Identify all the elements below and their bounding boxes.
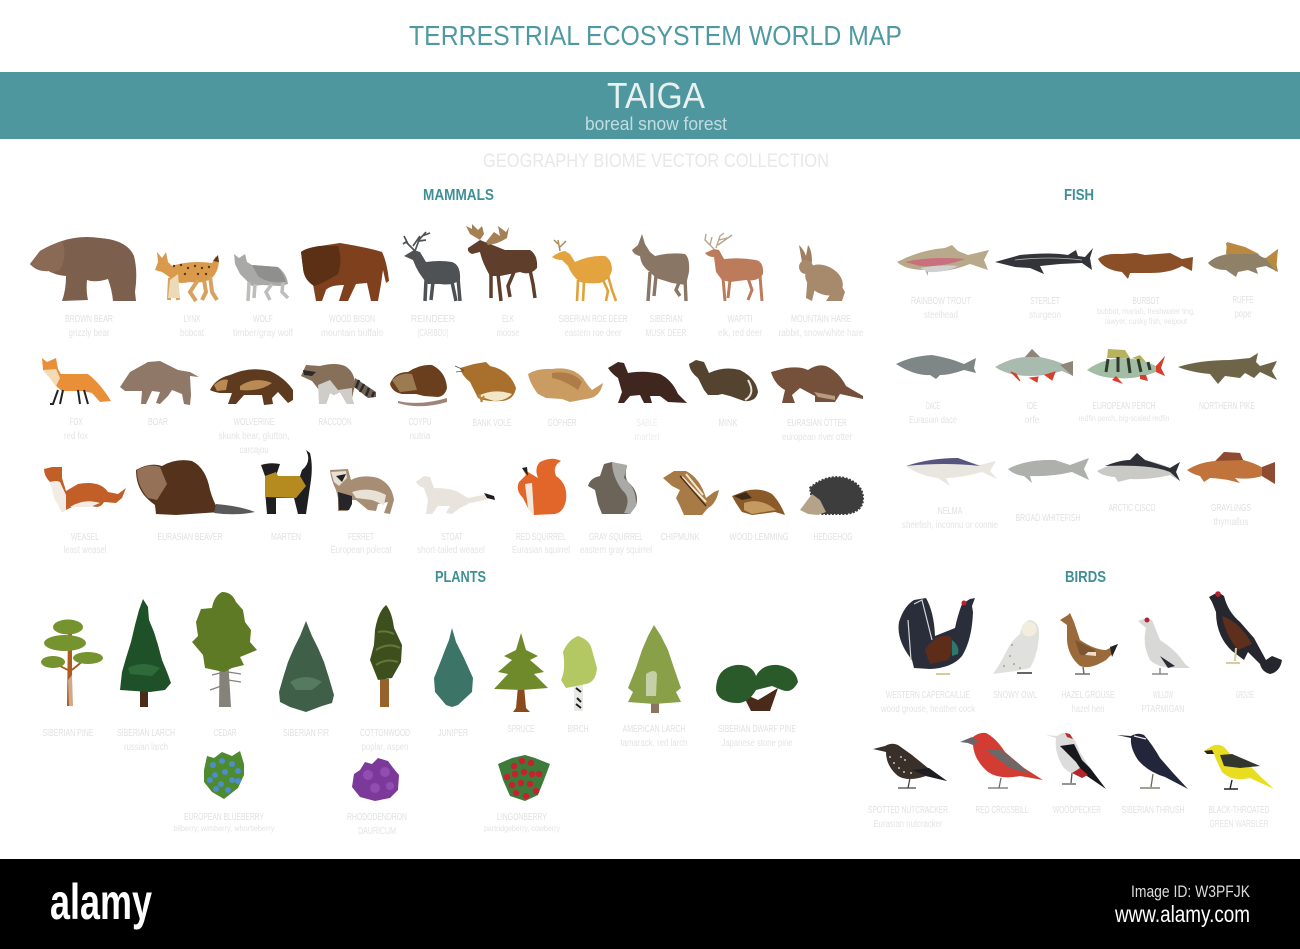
weasel (44, 467, 126, 556)
siberian thrush: SIBERIAN THRUSH (1122, 805, 1184, 816)
ide (995, 349, 1073, 426)
chipmunk: CHIPMUNK (660, 532, 700, 543)
ide: orfe (1024, 415, 1040, 426)
broad whitefish (1008, 458, 1089, 524)
spruce (494, 633, 548, 735)
siberian roe deer: SIBERIAN ROE DEER (558, 314, 628, 325)
dace: Eurasian dace (909, 415, 957, 426)
juniper (434, 628, 473, 739)
graylings: GRAYLINGS (1211, 503, 1251, 514)
burbot: lawyer, cusky fish, eelpout (1105, 316, 1188, 326)
red squirrel: Eurasian squirrel (512, 545, 570, 556)
american larch: AMERICAN LARCH (622, 724, 686, 735)
banner: taiga: boreal snow forest (585, 114, 727, 134)
elk (466, 224, 537, 339)
ruffe (1208, 242, 1278, 320)
mountain hare: rabbit, snow/white hare (778, 328, 864, 339)
siberian pine: SIBERIAN PINE (42, 728, 94, 739)
marten: MARTEN (271, 532, 301, 543)
bank vole (455, 362, 516, 429)
spotted nutcracker (868, 744, 948, 830)
red squirrel (512, 459, 570, 556)
american larch: tamarack, red larch (620, 738, 688, 749)
chipmunk (660, 471, 719, 543)
banner: taiga: TAIGA (607, 75, 705, 116)
gray squirrel: GRAY SQUIRREL (589, 532, 643, 543)
panel: birds (868, 569, 1282, 830)
red crossbill (960, 733, 1043, 816)
ruffe: RUFFE (1232, 295, 1254, 306)
subtitle: GEOGRAPHY BIOME VECTOR COLLECTION (483, 151, 829, 172)
eurasian otter (771, 365, 863, 443)
sterlet (995, 248, 1093, 321)
cottonwood (360, 605, 410, 753)
american larch (620, 625, 688, 749)
mountain hare: MOUNTAIN HARE (791, 314, 851, 325)
wolverine: skunk bear, glutton, (218, 431, 290, 442)
siberian larch: russian larch (124, 742, 168, 753)
eurasian otter: EURASIAN OTTER (787, 418, 847, 429)
siberian fir: SIBERIAN FIR (283, 728, 329, 739)
burbot: BURBOT (1132, 296, 1160, 307)
weasel: WEASEL (71, 532, 99, 543)
european blueberry: EUROPEAN BLUEBERRY (184, 812, 264, 823)
cedar: CEDAR (214, 728, 236, 739)
birch (561, 636, 597, 735)
fox (42, 358, 111, 442)
snowy owl: SNOWY OWL (993, 690, 1037, 701)
wolverine (210, 369, 293, 456)
woodpecker (1046, 733, 1106, 816)
eurasian beaver (136, 460, 255, 543)
arctic cisco (1097, 453, 1180, 514)
raccoon (301, 364, 376, 428)
fox: FOX (70, 417, 83, 428)
reindeer: REINDEER (411, 314, 455, 325)
heading: plants: PLANTS (435, 569, 486, 586)
footer bar: alamy (50, 874, 152, 930)
siberian roe deer (552, 240, 628, 339)
broad whitefish: BROAD WHITEFISH (1016, 513, 1080, 524)
wapiti: WAPITI (728, 314, 752, 325)
siberian dwarf pine: SIBERIAN DWARF PINE (718, 724, 796, 735)
banner: taiga (0, 72, 1300, 139)
ferret: FERRET (348, 532, 374, 543)
rhododendron dauricum: RHODODENDRON (347, 812, 407, 823)
siberian fir (279, 621, 334, 739)
rainbow trout: RAINBOW TROUT (911, 296, 971, 307)
sable: marten (634, 432, 660, 443)
ferret: European polecat (330, 545, 392, 556)
siberian pine (41, 620, 103, 739)
graylings (1187, 452, 1275, 528)
wood bison: WOOD BISON (329, 314, 375, 325)
hedgehog: HEDGEHOG (814, 532, 853, 543)
wapiti (705, 233, 763, 339)
raccoon: RACCOON (318, 417, 352, 428)
rainbow trout: steelhead (924, 310, 958, 321)
gray squirrel: eastern gray squirrel (580, 545, 652, 556)
coypu (390, 365, 447, 442)
lynx: bobcat (180, 328, 204, 339)
spruce: SPRUCE (508, 724, 535, 735)
dace: DACE (926, 401, 940, 412)
rainbow trout (897, 245, 989, 321)
eurasian beaver: EURASIAN BEAVER (158, 532, 222, 543)
lingonberry (484, 755, 561, 833)
siberian roe deer: eastern roe deer (564, 328, 622, 339)
heading: birds: BIRDS (1065, 569, 1106, 586)
hazel grouse: HAZEL GROUSE (1062, 690, 1115, 701)
willow ptarmigan: WILLOW (1153, 690, 1173, 701)
nelma (902, 458, 998, 531)
cottonwood: poplar, aspen (362, 742, 408, 753)
panel: fish (896, 187, 1278, 531)
ruffe: pope (1234, 309, 1252, 320)
marten (261, 450, 312, 543)
dace (896, 355, 976, 426)
rhododendron dauricum (347, 758, 407, 837)
red crossbill: RED CROSSBILL (976, 805, 1029, 816)
rhododendron dauricum: DAURICUM (358, 826, 396, 837)
snowy owl (993, 620, 1039, 701)
red squirrel: RED SQUIRREL (516, 532, 566, 543)
wood bison (301, 243, 389, 339)
lynx (155, 252, 219, 339)
stoat (416, 476, 495, 556)
burbot: bubbot, mariah, freshwater ling, (1097, 306, 1195, 316)
gray squirrel (580, 462, 652, 556)
spotted nutcracker: SPOTTED NUTCRACKER (868, 805, 948, 816)
footer bar (0, 859, 1300, 949)
siberian thrush (1117, 734, 1188, 816)
boar (120, 361, 199, 428)
reindeer: (CARIBOU) (418, 328, 448, 339)
lingonberry: LINGONBERRY (497, 812, 547, 823)
elk: ELK (502, 314, 514, 325)
fox: red fox (64, 431, 88, 442)
wolf: timber/gray wolf (233, 328, 293, 339)
northern pike (1178, 353, 1277, 412)
elk: moose (496, 328, 520, 339)
western capercaillie: wood grouse, heather cock (880, 704, 976, 715)
spotted nutcracker: Eurasian nutcracker (874, 819, 943, 830)
hazel grouse (1060, 613, 1118, 715)
ide: IDE (1026, 401, 1038, 412)
european perch: EUROPEAN PERCH (1092, 401, 1156, 412)
sterlet: STERLET (1030, 296, 1060, 307)
mink (689, 360, 758, 429)
western capercaillie (880, 598, 976, 715)
black-throated green warbler (1204, 745, 1274, 830)
nelma: sheefish, inconnu or connie (902, 520, 998, 531)
siberian dwarf pine: Japanese stone pine (722, 738, 793, 749)
wolf (233, 254, 293, 339)
wapiti: elk, red deer (718, 328, 763, 339)
gopher (528, 368, 603, 429)
siberian larch (117, 599, 175, 753)
main title: TERRESTRIAL ECOSYSTEM WORLD MAP (409, 20, 902, 51)
woodpecker: WOODPECKER (1053, 805, 1101, 816)
wolverine: carcajou (240, 445, 268, 456)
siberian musk deer: SIBERIAN (650, 314, 682, 325)
gopher: GOPHER (548, 418, 576, 429)
cottonwood: COTTONWOOD (360, 728, 410, 739)
mink: MINK (718, 418, 738, 429)
siberian musk deer (632, 234, 689, 339)
birch: BIRCH (568, 724, 588, 735)
siberian musk deer: MUSK DEER (646, 328, 686, 339)
black-throated green warbler: GREEN WARBLER (1210, 819, 1268, 830)
siberian dwarf pine (716, 665, 798, 749)
brown bear (30, 237, 136, 339)
burbot (1097, 253, 1195, 326)
boar: BOAR (148, 417, 168, 428)
bank vole: BANK VOLE (472, 418, 512, 429)
willow ptarmigan (1138, 618, 1190, 715)
heading: mammals: MAMMALS (423, 187, 494, 204)
european perch: redfin perch, big-scaled redfin (1078, 413, 1170, 423)
coypu: COYPU (408, 417, 432, 428)
western capercaillie: WESTERN CAPERCAILLIE (886, 690, 970, 701)
siberian larch: SIBERIAN LARCH (117, 728, 175, 739)
wood lemming (730, 490, 789, 543)
grouse (1209, 591, 1282, 701)
hazel grouse: hazel hen (1072, 704, 1104, 715)
sterlet: sturgeon (1029, 310, 1061, 321)
eurasian otter: european river otter (782, 432, 853, 443)
lingonberry: partridgeberry, cowberry (484, 823, 561, 833)
heading: fish: FISH (1064, 187, 1094, 204)
wood lemming: WOOD LEMMING (730, 532, 789, 543)
nelma: NELMA (938, 506, 963, 517)
european blueberry (174, 751, 275, 833)
reindeer (403, 232, 460, 339)
brown bear: BROWN BEAR (65, 314, 113, 325)
footer bar: www.alamy.com (1114, 901, 1250, 927)
sable (608, 362, 687, 443)
grouse: GROUSE (1236, 690, 1254, 701)
european perch (1078, 349, 1170, 423)
european blueberry: bilberry, wimberry, whortleberry (174, 823, 275, 833)
sable: SABLE (636, 418, 658, 429)
wood bison: mountain buffalo (321, 328, 383, 339)
wolf: WOLF (253, 314, 273, 325)
lynx: LYNX (184, 314, 201, 325)
black-throated green warbler: BLACK-THROATED (1208, 805, 1270, 816)
northern pike: NORTHERN PIKE (1199, 401, 1255, 412)
wolverine: WOLVERINE (234, 417, 275, 428)
stoat: short-tailed weasel (417, 545, 485, 556)
footer bar: Image ID: W3PFJK (1131, 882, 1251, 901)
hedgehog (800, 477, 863, 543)
cedar (192, 592, 257, 739)
weasel: least weasel (64, 545, 106, 556)
arctic cisco: ARCTIC CISCO (1108, 503, 1156, 514)
willow ptarmigan: PTARMIGAN (1142, 704, 1184, 715)
stoat: STOAT (442, 532, 462, 543)
panel: plants (41, 569, 798, 837)
mountain hare (778, 245, 864, 339)
juniper: JUNIPER (438, 728, 468, 739)
panel: mammals (30, 187, 864, 556)
graylings: thymallus (1214, 517, 1248, 528)
ferret (330, 469, 394, 556)
coypu: nutria (410, 431, 431, 442)
brown bear: grizzly bear (68, 328, 110, 339)
